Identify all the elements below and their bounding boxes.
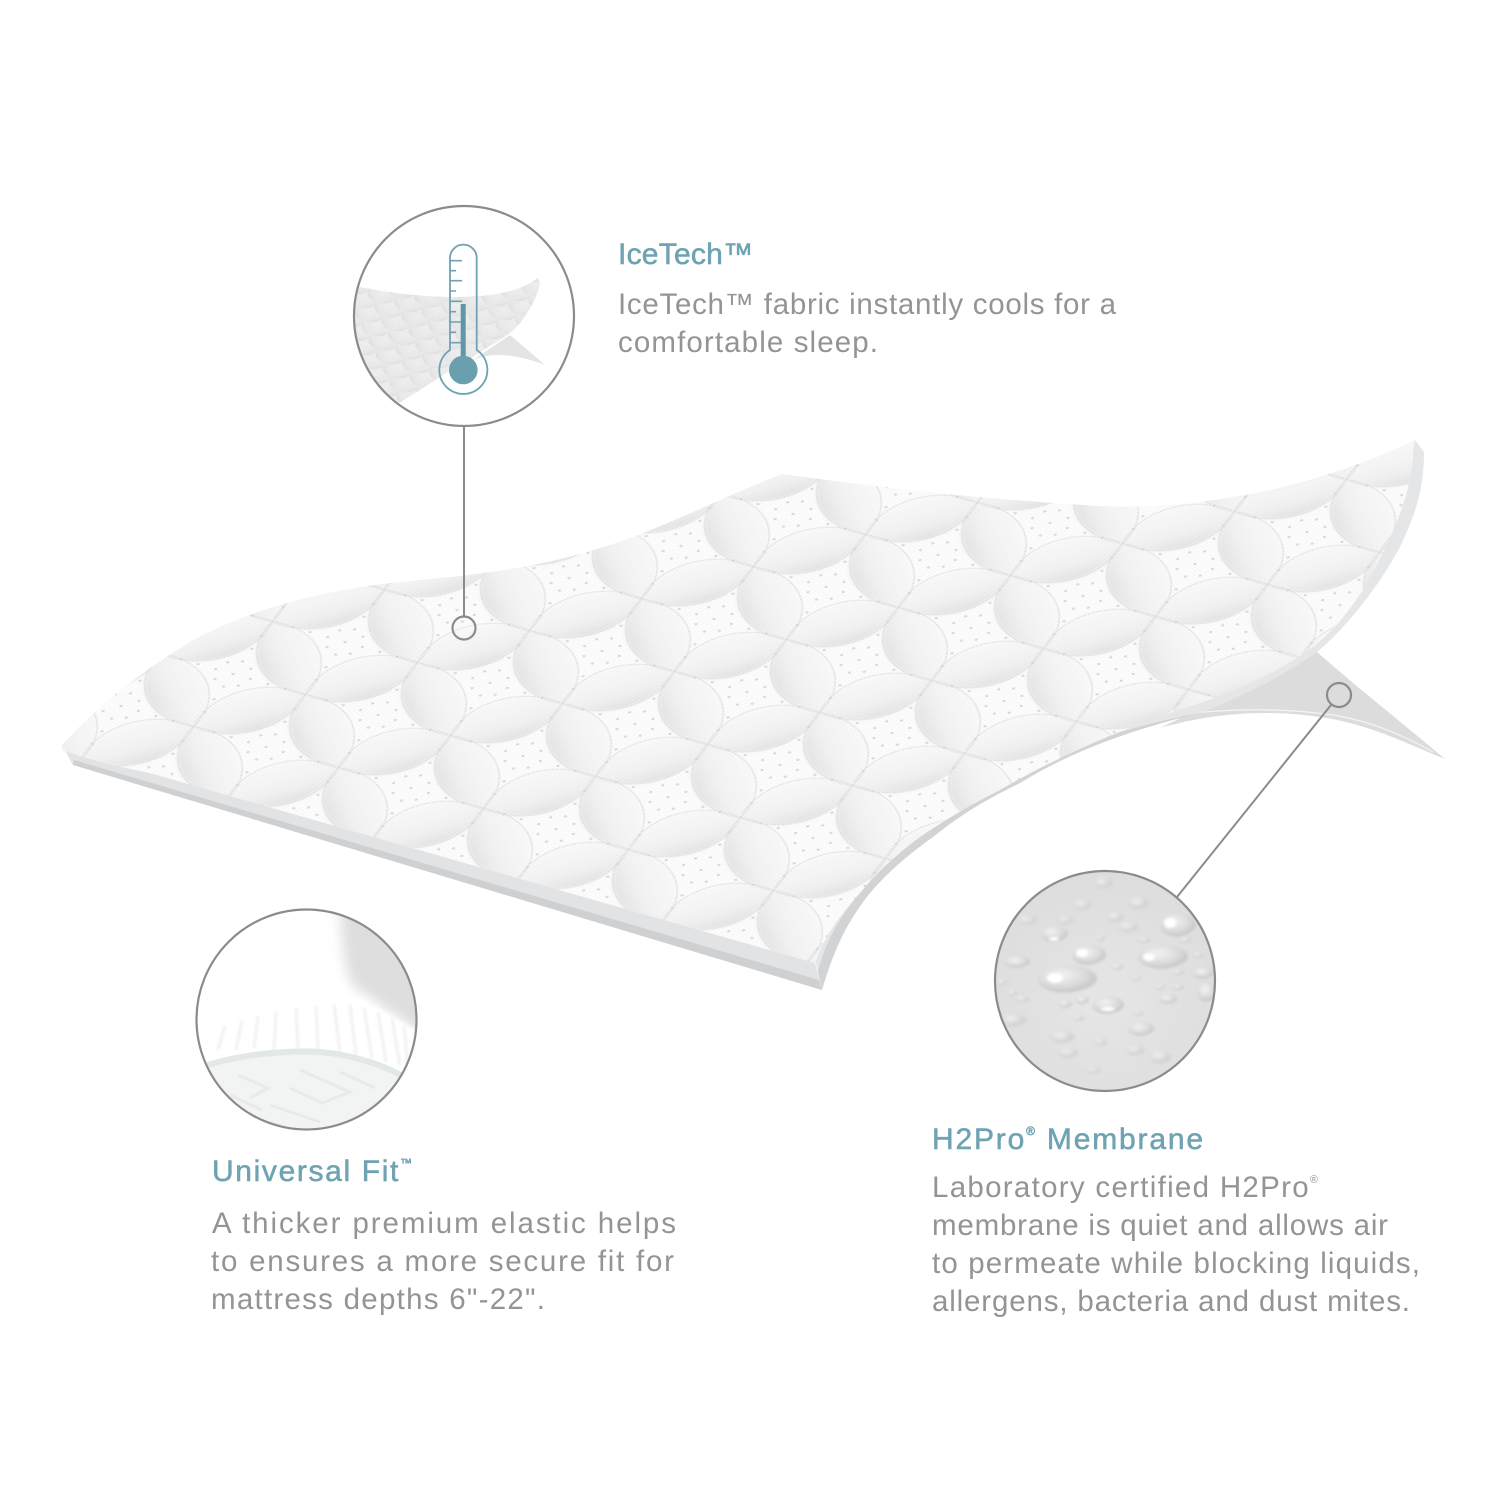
elastic ruffles <box>407 1026 414 1034</box>
mattress protector pad <box>62 440 1424 990</box>
leader line: membrane <box>1177 705 1331 897</box>
callout: IceTech <box>345 206 1117 640</box>
text: Universal Fit description: mattress depths 6"-22". <box>211 1283 545 1316</box>
text: IceTech description <box>618 288 1117 359</box>
text: H2Pro description: to permeate while blocking liquids, <box>932 1247 1420 1280</box>
detail circle: elastic edge <box>195 908 418 1131</box>
maze quilting <box>230 1070 375 1132</box>
mini membrane <box>470 335 545 365</box>
pad rim shadow <box>818 713 1200 990</box>
text: H2Pro description <box>932 1171 1420 1318</box>
text: Universal Fit description: A thicker premium elastic helps <box>212 1207 676 1240</box>
callout: H2Pro Membrane <box>932 683 1420 1318</box>
sharp droplets <box>997 913 1217 1036</box>
heading: Universal Fit: Universal Fit <box>212 1155 398 1188</box>
detail circle: water droplets <box>995 871 1217 1091</box>
heading: H2Pro Membrane: Membrane <box>1037 1123 1203 1156</box>
droplet highlights <box>1047 918 1176 1011</box>
pad side edge shadow <box>73 760 822 990</box>
text: H2Pro description: Laboratory certified H2Pro <box>932 1171 1309 1204</box>
heading: IceTech: IceTech™ <box>618 238 753 271</box>
detail circle: IceTech <box>345 206 574 426</box>
infographic: mattress protector features <box>62 204 1444 1317</box>
pad curved rim <box>800 440 1424 990</box>
mattress shadow corner <box>336 915 416 1030</box>
text: H2Pro description: membrane is quiet and allows air <box>932 1209 1388 1242</box>
pad side edge <box>63 747 822 990</box>
text: H2Pro description: ® <box>1310 1174 1318 1186</box>
soft distant droplets <box>1000 878 1171 1074</box>
leader line: IceTech <box>463 426 465 616</box>
text: IceTech description: IceTech™ fabric instantly cools for a <box>618 288 1117 321</box>
membrane layer under the mattress <box>1160 652 1445 759</box>
elastic seam <box>205 1052 402 1076</box>
pointer ring: membrane <box>1327 683 1351 707</box>
heading: Universal Fit: ™ <box>400 1156 412 1170</box>
pointer ring: IceTech <box>452 616 476 640</box>
heading: H2Pro Membrane: H2Pro <box>932 1123 1024 1156</box>
fitted surface <box>209 1054 398 1128</box>
text: H2Pro description: allergens, bacteria and dust mites. <box>932 1285 1410 1318</box>
text: Universal Fit description: to ensures a more secure fit for <box>211 1245 674 1278</box>
text: IceTech description: comfortable sleep. <box>618 326 878 359</box>
pad quilted surface <box>62 440 1415 963</box>
icon: thermometer <box>439 245 487 394</box>
heading: H2Pro Membrane: ® <box>1026 1124 1035 1138</box>
callout: Universal Fit <box>190 895 676 1316</box>
text: Universal Fit description <box>211 1207 676 1316</box>
mini pad <box>355 278 539 402</box>
